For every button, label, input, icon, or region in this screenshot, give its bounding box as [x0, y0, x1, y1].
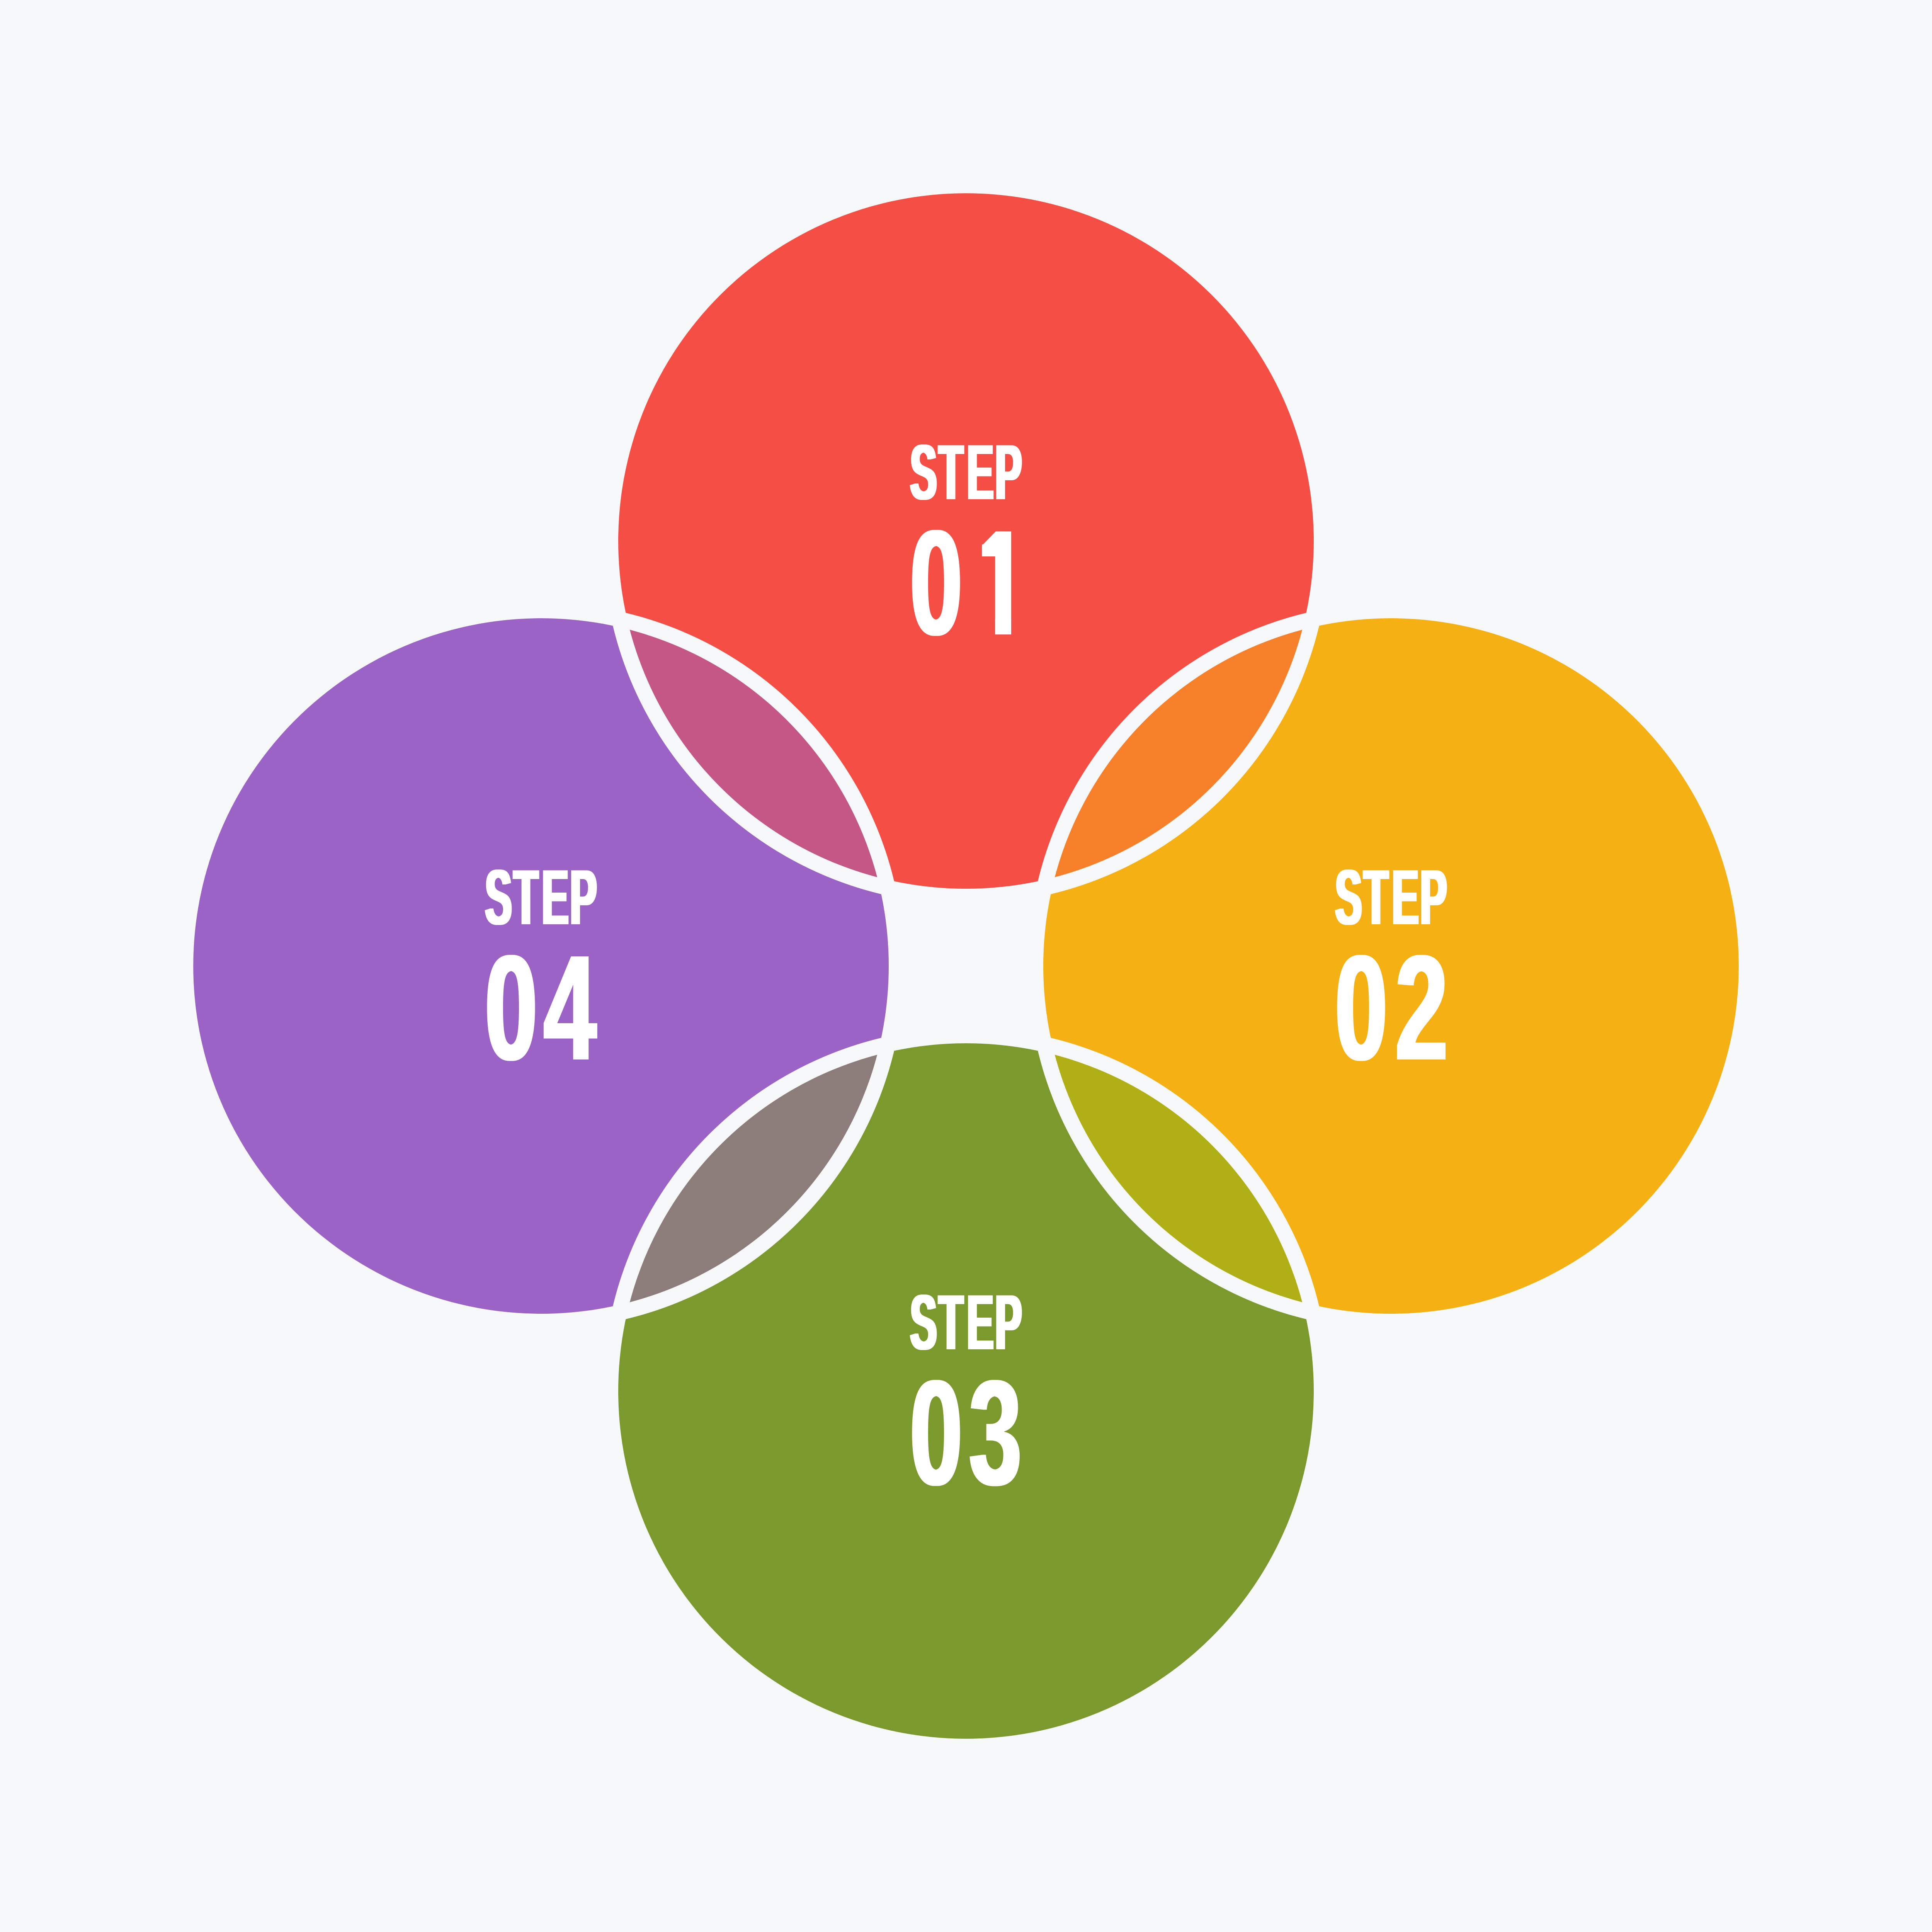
panel: step 02 circle — [1043, 618, 1739, 1314]
label: STEP 03: 03 — [910, 1349, 1022, 1517]
label: STEP 02: 02 — [1335, 923, 1448, 1092]
overlap: steps 03 and 04 — [630, 1055, 877, 1302]
panel: step 03 circle — [618, 1043, 1314, 1739]
panel: step 04 circle — [193, 618, 889, 1314]
label: STEP 04: STEP — [485, 854, 597, 941]
label: STEP 02: STEP — [1335, 854, 1447, 941]
overlap: steps 01 and 02 — [1055, 630, 1302, 877]
panel: step 01 circle — [618, 193, 1314, 889]
label: STEP 03: STEP — [910, 1279, 1022, 1366]
overlap: steps 04 and 01 — [630, 630, 877, 877]
overlap: steps 02 and 03 — [1055, 1055, 1302, 1302]
label: STEP 01 — [910, 429, 1038, 667]
label: STEP 01: STEP — [910, 429, 1022, 516]
label: STEP 01: 01 — [910, 498, 1027, 667]
label: STEP 04: 04 — [485, 923, 597, 1092]
